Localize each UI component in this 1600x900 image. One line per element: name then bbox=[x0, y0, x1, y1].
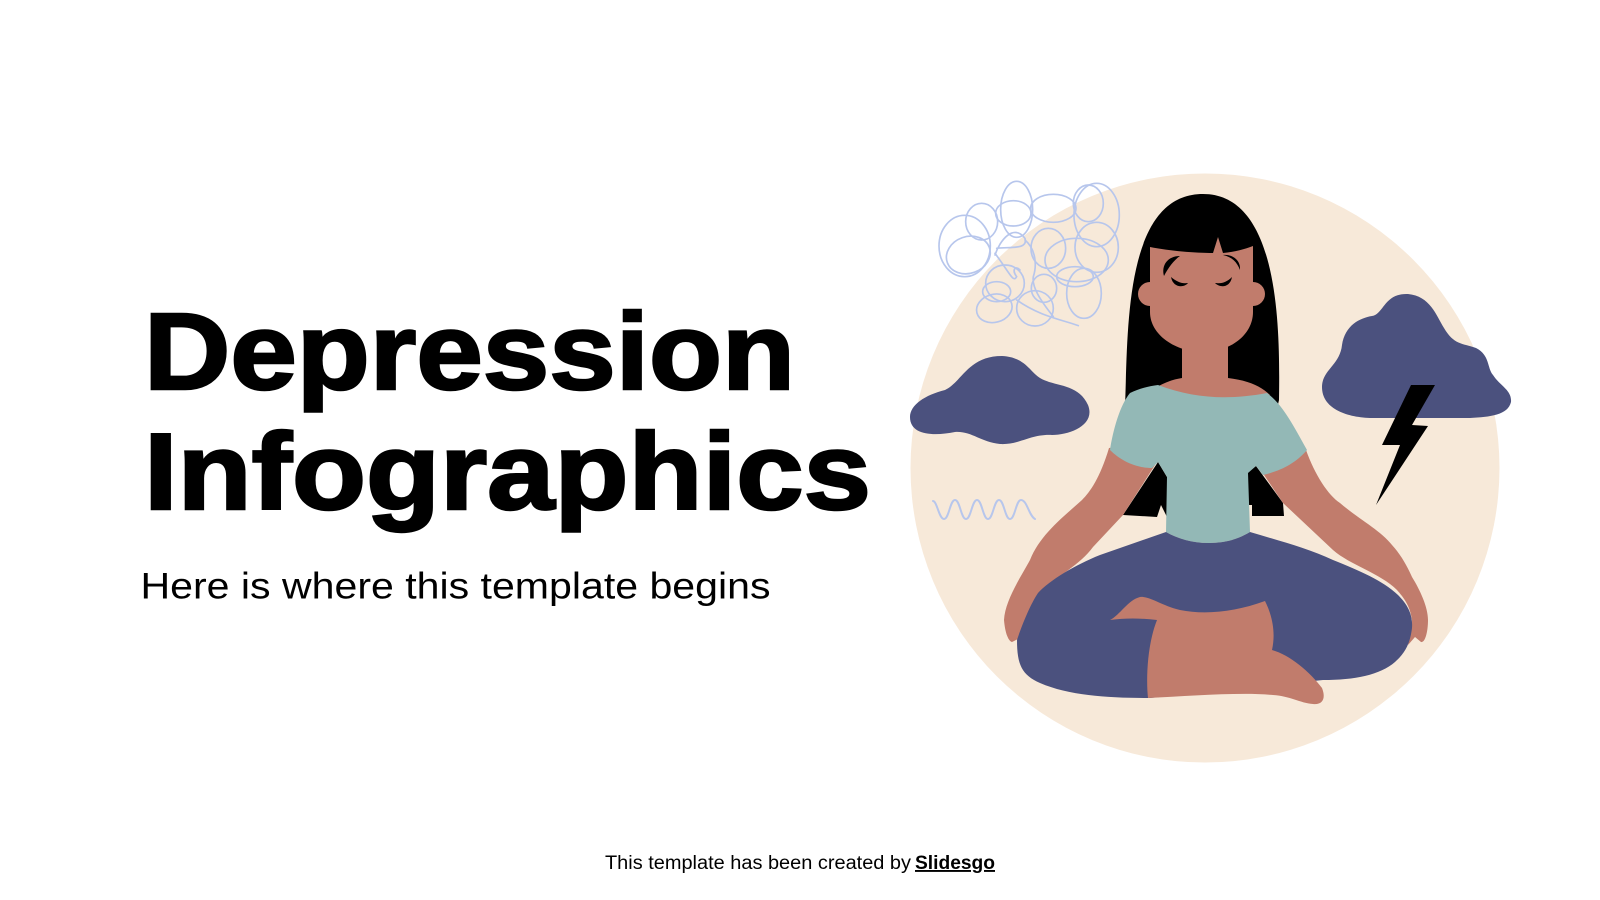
closed eyes bbox=[1171, 277, 1232, 286]
illustration: meditating woman bbox=[910, 174, 1511, 762]
icon: tangled thought scribble bbox=[939, 181, 1119, 326]
ears bbox=[1138, 282, 1162, 306]
icon: wavy line bbox=[933, 500, 1035, 519]
hair bbox=[1125, 194, 1279, 440]
icon: lightning bolt bbox=[1376, 385, 1435, 505]
right arm bbox=[1262, 445, 1428, 645]
face bbox=[1150, 237, 1253, 352]
neck and chest bbox=[1155, 340, 1270, 405]
subtitle: Here is where this template begins bbox=[140, 566, 770, 606]
legs bbox=[1017, 532, 1412, 698]
footer credit: This template has been created by bbox=[605, 853, 912, 874]
eyebrows bbox=[1163, 255, 1240, 276]
footer credit: Slidesgo bbox=[915, 853, 995, 874]
crossed foot bbox=[1110, 597, 1324, 704]
shirt bbox=[1110, 385, 1307, 543]
left arm bbox=[1004, 445, 1155, 642]
hair ends bbox=[1123, 462, 1284, 517]
title: Depression bbox=[144, 291, 795, 413]
icon: left cloud bbox=[910, 356, 1089, 444]
title: Infographics bbox=[144, 411, 871, 533]
title bbox=[144, 291, 871, 533]
icon: storm cloud bbox=[1322, 294, 1511, 418]
background circle bbox=[910, 174, 1500, 762]
woman figure bbox=[1004, 194, 1428, 704]
